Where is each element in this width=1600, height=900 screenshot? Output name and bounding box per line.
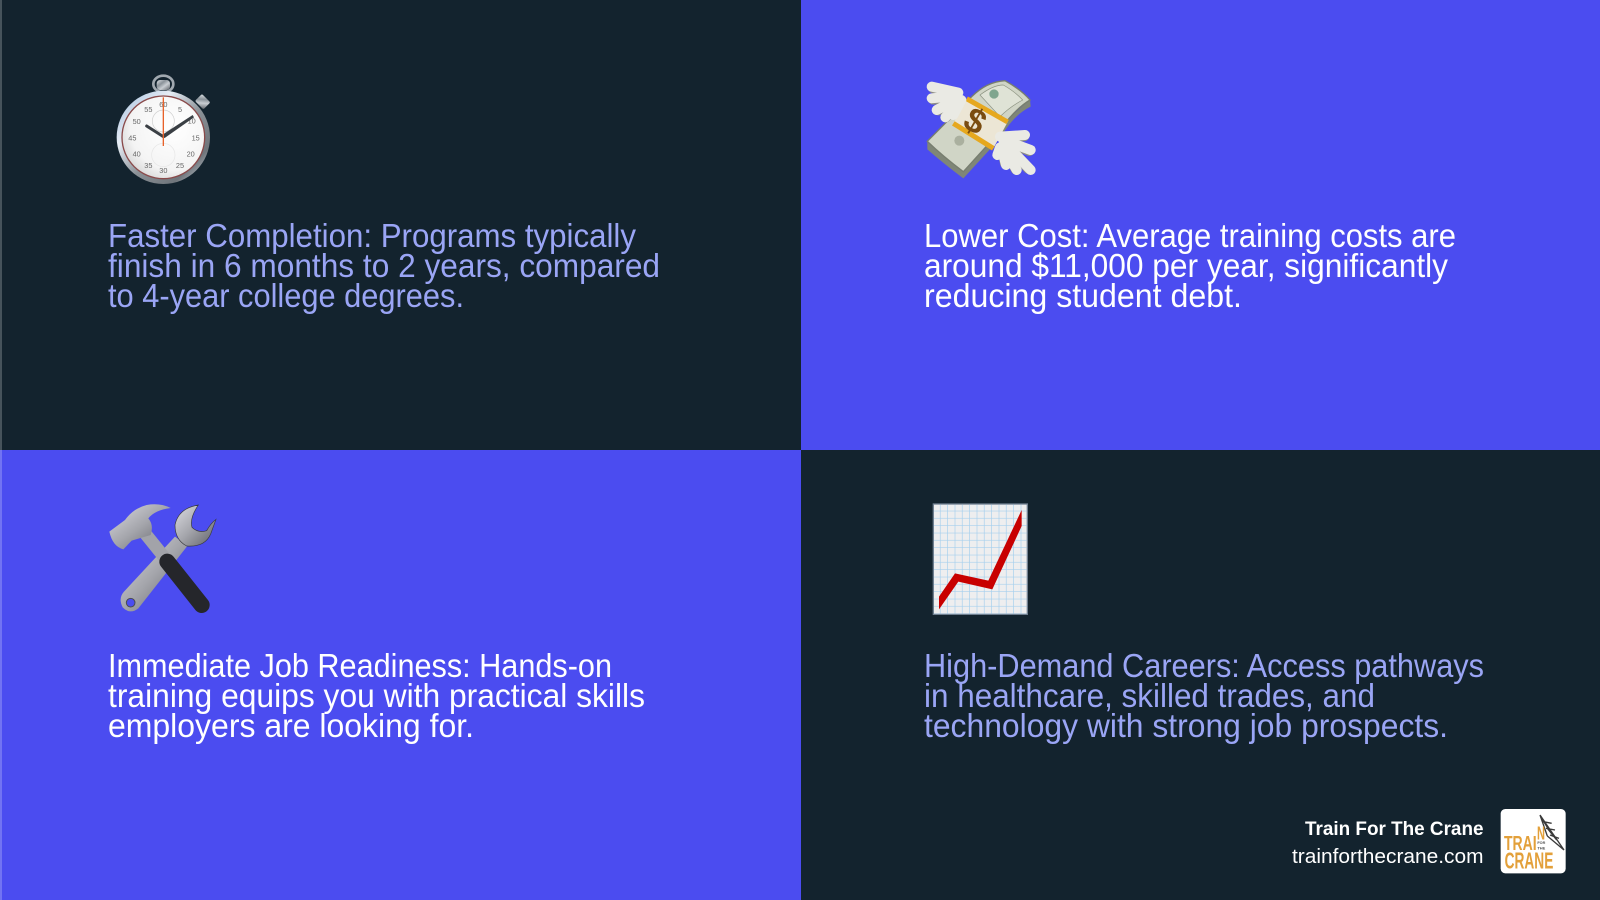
text: immediate job readiness: Immediate Job Readiness: Hands-on <box>108 647 612 684</box>
text: lower cost: around $11,000 per year, significantly <box>924 247 1448 284</box>
icon: money with wings: $ <box>957 100 993 143</box>
icon: stopwatch: 30 <box>159 166 167 175</box>
icon: hammer and wrench <box>109 504 216 611</box>
text: high-demand careers: technology with strong job prospects. <box>924 707 1448 744</box>
text: lower cost <box>924 217 1456 314</box>
icon: stopwatch: 20 <box>187 149 195 158</box>
text: high-demand careers <box>924 647 1484 744</box>
text: immediate job readiness: training equips you with practical skills <box>108 677 645 714</box>
logo: train for the crane: THE <box>1537 846 1546 850</box>
icon: stopwatch: 55 <box>144 105 152 114</box>
icon: stopwatch: 35 <box>144 161 152 170</box>
text: faster completion: Faster Completion: Programs typically <box>108 217 636 254</box>
icon: stopwatch: 25 <box>176 161 184 170</box>
logo: train for the crane: TRAI <box>1504 832 1537 855</box>
icon: stopwatch: 5 <box>178 105 182 114</box>
text: immediate job readiness <box>108 647 645 744</box>
footer brand name: Train For The Crane <box>1305 819 1484 840</box>
text: faster completion <box>108 217 660 314</box>
text: high-demand careers: High-Demand Careers: Access pathways <box>924 647 1484 684</box>
logo: train for the crane: CRANE <box>1505 848 1553 874</box>
logo: train for the crane <box>1501 809 1566 874</box>
icon: rising chart <box>933 504 1027 614</box>
logo: train for the crane: N <box>1537 822 1545 843</box>
text: faster completion: finish in 6 months to 2 years, compared <box>108 247 660 284</box>
panel: faster completion <box>0 0 801 450</box>
icon: stopwatch: 10 <box>188 117 196 126</box>
panel: lower cost <box>801 0 1600 450</box>
text: lower cost: reducing student debt. <box>924 277 1242 314</box>
logo: train for the crane: FOR <box>1537 841 1546 845</box>
icon: stopwatch: 45 <box>128 133 136 142</box>
text: lower cost: Lower Cost: Average training costs are <box>924 217 1456 254</box>
icon: stopwatch: 15 <box>192 133 200 142</box>
text: high-demand careers: in healthcare, skilled trades, and <box>924 677 1375 714</box>
footer website: trainforthecrane.com <box>1292 846 1484 868</box>
panel: immediate job readiness <box>0 450 801 900</box>
panel: high-demand careers <box>801 450 1600 900</box>
icon: stopwatch <box>117 76 210 184</box>
text: immediate job readiness: employers are looking for. <box>108 707 474 744</box>
text: faster completion: to 4-year college degrees. <box>108 277 464 314</box>
icon: stopwatch: 50 <box>133 117 141 126</box>
icon: money with wings <box>927 81 1031 178</box>
icon: stopwatch: 40 <box>133 149 141 158</box>
icon: stopwatch: 60 <box>159 100 167 109</box>
